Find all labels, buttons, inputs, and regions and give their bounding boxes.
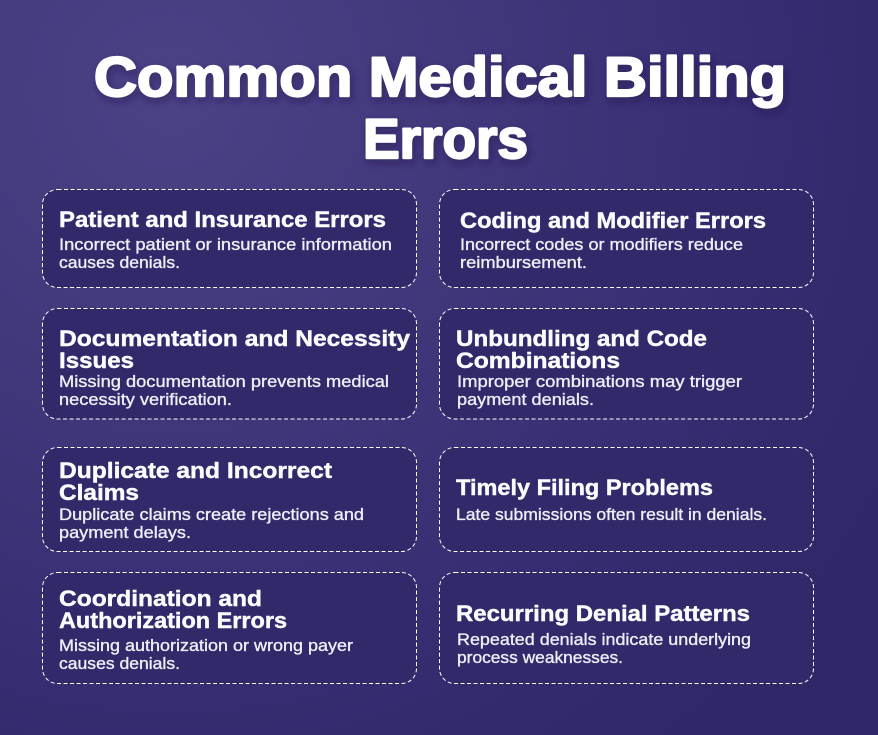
heading: coding and modifier errors: Coding and Modifier Errors [460, 208, 766, 233]
panel: duplicate and incorrect claims [42, 448, 416, 552]
panel: documentation and necessity issues [42, 308, 416, 419]
heading: timely filing problems: Timely Filing Problems [456, 475, 713, 500]
text: documentation description: Missing documentation prevents medical [59, 373, 389, 391]
text: duplicate claims description [59, 506, 364, 542]
text: patient and insurance description: causes denials. [59, 254, 180, 272]
text: recurring denial description: process weaknesses. [457, 649, 623, 667]
panel: coordination and authorization errors [42, 572, 416, 684]
panel: timely filing problems [440, 448, 814, 552]
panel: coding and modifier errors [440, 190, 814, 288]
text: coordination description [59, 637, 354, 673]
text: duplicate claims description: payment delays. [59, 524, 191, 542]
text: unbundling description: payment denials. [457, 391, 594, 409]
text: duplicate claims description: Duplicate claims create rejections and [59, 506, 364, 524]
heading: documentation and necessity issues [59, 326, 411, 373]
heading: documentation and necessity issues: Documentation and Necessity [59, 326, 411, 351]
text: documentation description: necessity verification. [59, 391, 232, 409]
text: recurring denial description: Repeated denials indicate underlying [457, 631, 751, 649]
heading: duplicate and incorrect claims [59, 458, 333, 505]
panel: patient and insurance errors [42, 190, 416, 288]
heading: unbundling and code combinations [456, 326, 707, 373]
heading: recurring denial patterns: Recurring Denial Patterns [456, 601, 750, 626]
heading: coordination and authorization errors: Coordination and [59, 586, 262, 611]
heading: unbundling and code combinations: Unbundling and Code [456, 326, 707, 351]
heading: duplicate and incorrect claims: Duplicate and Incorrect [59, 458, 333, 483]
text: coding and modifier description: Incorrect codes or modifiers reduce [460, 236, 743, 254]
text: documentation description [59, 373, 389, 409]
text: coding and modifier description: reimbursement. [460, 254, 587, 272]
heading: unbundling and code combinations: Combinations [456, 348, 620, 373]
heading: patient and insurance errors: Patient and Insurance Errors [59, 207, 386, 232]
text: unbundling description [457, 373, 743, 409]
text: coding and modifier description [460, 236, 743, 272]
panel: unbundling and code combinations [440, 308, 814, 419]
text: timely filing description: Late submissions often result in denials. [456, 506, 767, 524]
text: coordination description: Missing authorization or wrong payer [59, 637, 354, 655]
heading: coordination and authorization errors [59, 586, 287, 633]
heading: coordination and authorization errors: Authorization Errors [59, 608, 287, 633]
text: patient and insurance description [59, 236, 392, 272]
text: unbundling description: Improper combinations may trigger [457, 373, 743, 391]
text: recurring denial description [457, 631, 751, 667]
title [94, 45, 786, 170]
panel: recurring denial patterns [440, 572, 814, 684]
text: patient and insurance description: Incorrect patient or insurance information [59, 236, 392, 254]
text: coordination description: causes denials. [59, 655, 180, 673]
heading: documentation and necessity issues: Issues [59, 348, 134, 373]
heading: duplicate and incorrect claims: Claims [59, 480, 139, 505]
title: Common Medical Billing [94, 45, 786, 108]
title: Errors [363, 107, 528, 170]
